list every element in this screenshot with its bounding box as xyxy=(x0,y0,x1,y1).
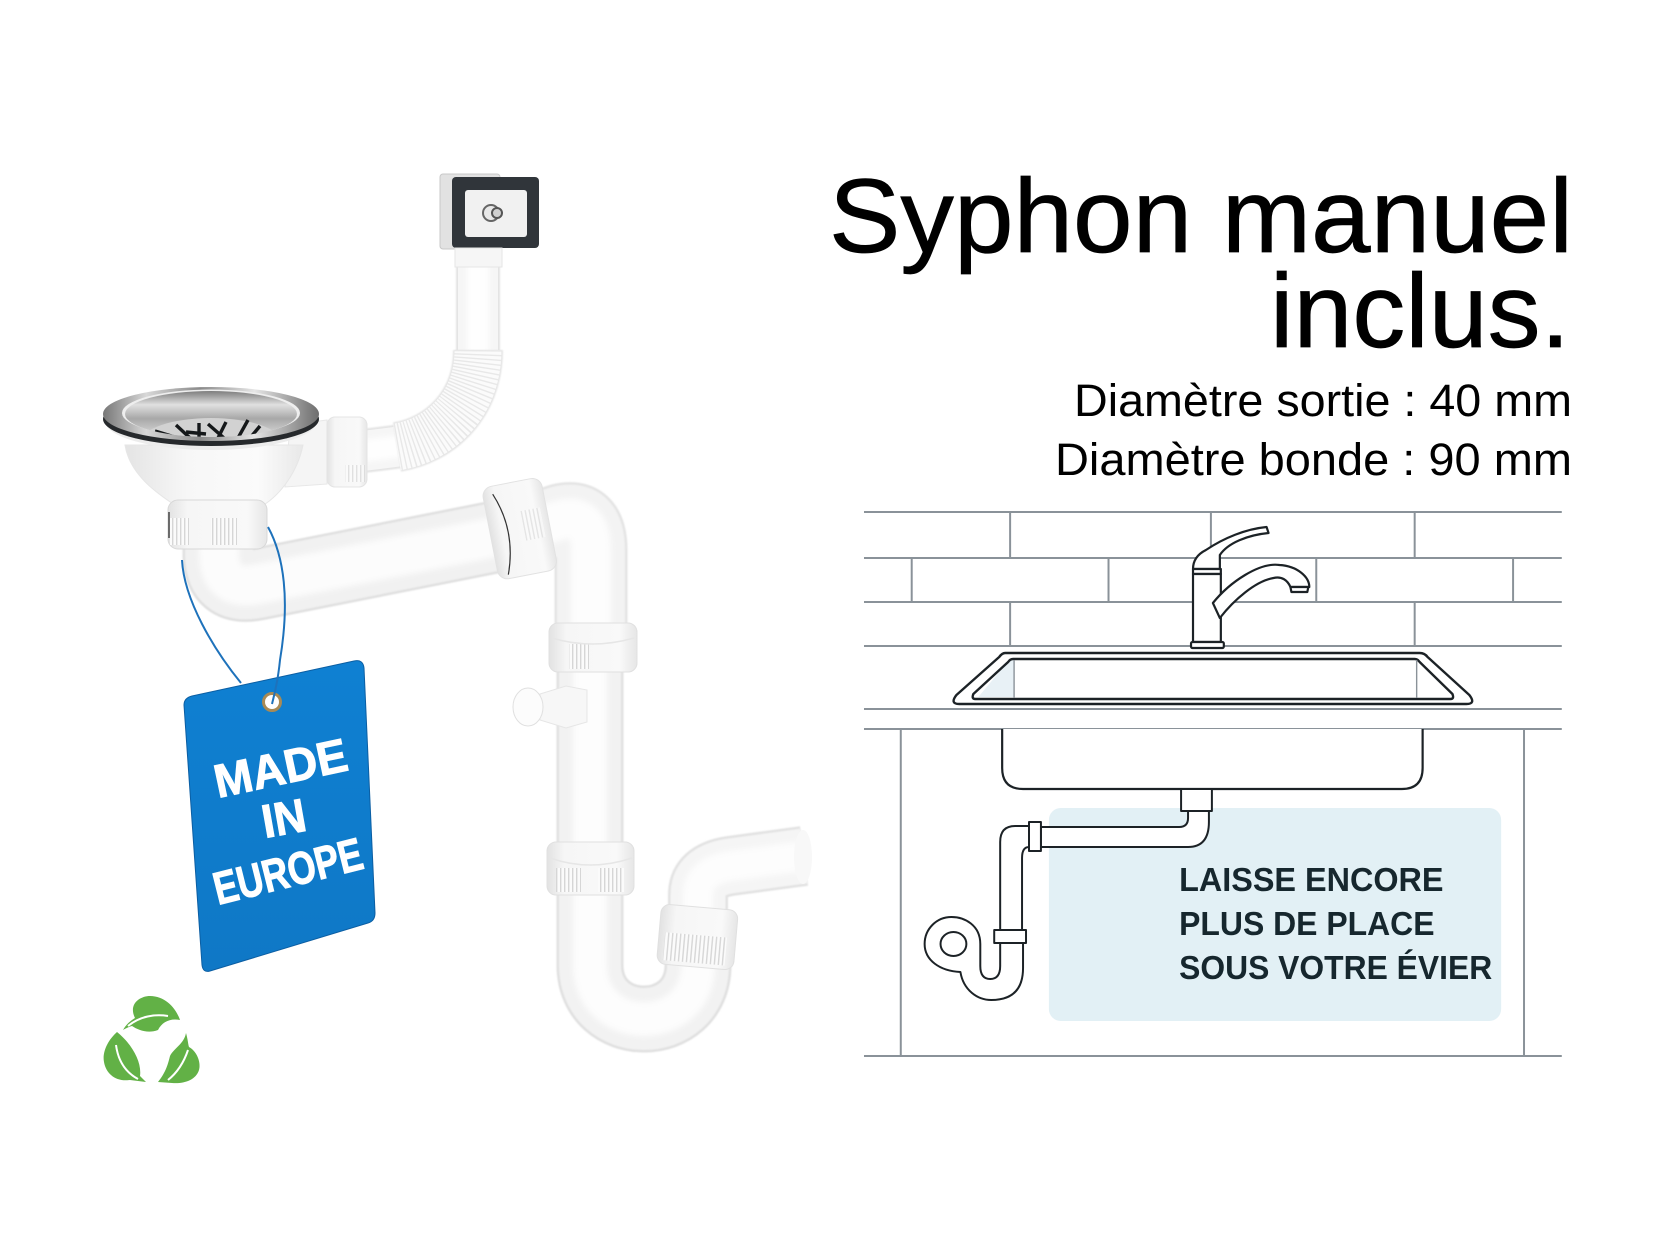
product: sink waste kit with siphon xyxy=(103,174,812,1019)
sink basin top rim xyxy=(954,653,1472,704)
upper pipe nut xyxy=(549,623,637,672)
teal free-space box xyxy=(1049,808,1501,1021)
faucet xyxy=(1191,527,1309,648)
tag text: EUROPE xyxy=(208,827,368,915)
tag text: IN xyxy=(258,788,310,848)
sink basin underside xyxy=(1002,729,1423,789)
icon: recycling leaves xyxy=(104,996,200,1083)
pipe coupling nut xyxy=(481,477,558,580)
side inlet stub xyxy=(513,686,587,728)
title: inclus. xyxy=(1270,253,1570,370)
strainer nut xyxy=(168,500,267,549)
space callout text: SOUS VOTRE ÉVIER xyxy=(1179,949,1492,986)
vertical pipe and P-trap bend xyxy=(590,640,698,1019)
outlet nut xyxy=(656,904,738,970)
lower pipe elbow and horizontal pipe xyxy=(219,535,505,585)
elbow and upper vertical pipe xyxy=(530,519,591,640)
title xyxy=(829,158,1573,370)
tag card xyxy=(184,661,375,971)
lower pipe nut xyxy=(547,842,634,895)
strainer outlet collar xyxy=(285,417,367,487)
tag: made in Europe xyxy=(182,527,375,971)
outlet elbow xyxy=(698,830,812,925)
specifications text: Diamètre sortie : 40 mm xyxy=(1074,375,1572,426)
tag text: MADE xyxy=(209,728,352,808)
tag wire xyxy=(182,527,285,704)
space callout text xyxy=(1179,861,1492,986)
sink inner shading xyxy=(978,659,1014,697)
eyelet xyxy=(264,694,280,710)
title: Syphon manuel xyxy=(829,158,1573,275)
space callout text: LAISSE ENCORE xyxy=(1179,861,1443,898)
specifications text xyxy=(1055,375,1572,485)
specifications text: Diamètre bonde : 90 mm xyxy=(1055,434,1572,485)
under-sink pipe and trap xyxy=(925,789,1212,1000)
bowl xyxy=(125,445,303,506)
tag text xyxy=(208,728,368,915)
stainless strainer xyxy=(103,387,319,450)
space callout text: PLUS DE PLACE xyxy=(1179,905,1435,942)
overflow plate xyxy=(440,174,539,249)
tiled wall and cabinet lines xyxy=(864,512,1562,1056)
illustration: kitchen sink cross-section xyxy=(864,512,1562,1056)
overflow tube and flexible hose xyxy=(330,248,502,455)
